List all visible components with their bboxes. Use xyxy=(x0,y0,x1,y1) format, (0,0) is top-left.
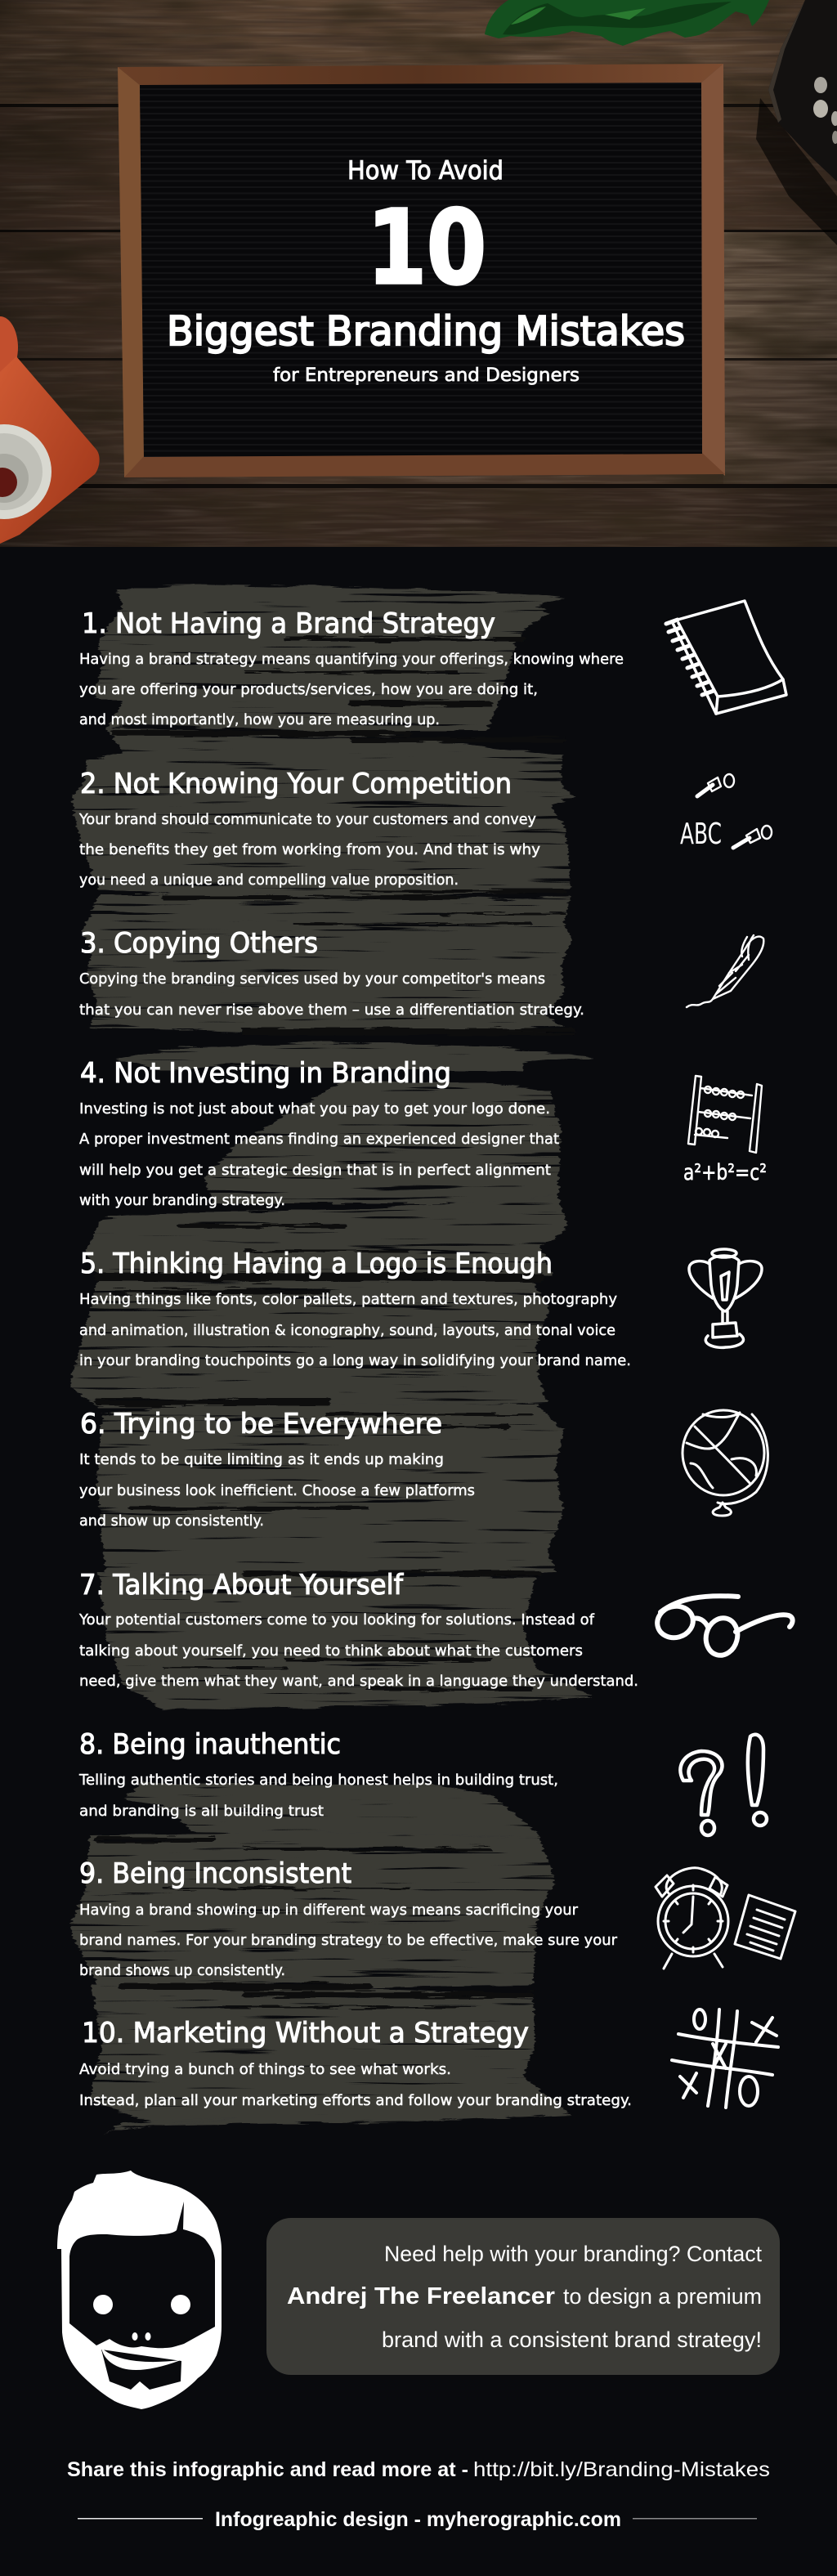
icon: tic tac toe xyxy=(672,2009,778,2108)
body line: and animation, illustration & iconography, sound, layouts, and tonal voice xyxy=(79,1322,615,1339)
item 3 xyxy=(79,927,584,1019)
body line: Having things like fonts, color pallets, pattern and textures, photography xyxy=(79,1291,617,1308)
brush stroke background xyxy=(69,584,593,2135)
body line: Telling authentic stories and being honest helps in building trust, xyxy=(78,1772,558,1789)
callout line: Need help with your branding? Contact xyxy=(384,2242,762,2266)
icon: alarm clock and paper xyxy=(656,1868,795,1969)
hero photo: wooden table xyxy=(0,0,837,547)
body line: in your branding touchpoints go a long way in solidifying your brand name. xyxy=(79,1352,631,1369)
nostrils xyxy=(132,2332,150,2341)
formula: a²+b²=c² xyxy=(683,1160,767,1185)
callout line: brand with a consistent brand strategy! xyxy=(382,2327,762,2352)
body line: Copying the branding services used by your competitor's means xyxy=(79,970,545,988)
body line: need, give them what they want, and speak in a language they understand. xyxy=(79,1673,638,1690)
body line: brand shows up consistently. xyxy=(79,1962,285,1979)
body line: brand names. For your branding strategy to be effective, make sure your xyxy=(79,1932,618,1949)
item 5 xyxy=(79,1248,631,1369)
heading: 9. Being Inconsistent xyxy=(79,1857,351,1890)
face xyxy=(69,2202,215,2348)
body line: with your branding strategy. xyxy=(79,1192,285,1209)
photo prop: vintage typewriter xyxy=(756,0,837,245)
heading: 5. Thinking Having a Logo is Enough xyxy=(80,1248,553,1280)
body line: you need a unique and compelling value proposition. xyxy=(79,871,459,889)
item 7 xyxy=(78,1569,638,1690)
heading: 3. Copying Others xyxy=(80,927,318,960)
heading: 7. Talking About Yourself xyxy=(79,1569,404,1602)
pin xyxy=(697,774,734,796)
heading: 1. Not Having a Brand Strategy xyxy=(82,607,495,640)
frame: bottom rail xyxy=(124,453,725,477)
heading: 4. Not Investing in Branding xyxy=(80,1057,451,1090)
frame: right rail xyxy=(701,64,725,476)
body line: that you can never rise above them – use a differentiation strategy. xyxy=(79,1001,584,1019)
icon: question and exclamation marks xyxy=(680,1735,767,1835)
text: ABC: ABC xyxy=(680,818,722,851)
icon: pen xyxy=(687,935,763,1007)
body line: talking about yourself, you need to think about what the customers xyxy=(79,1642,583,1660)
alarm clock xyxy=(656,1868,728,1969)
icon: trophy xyxy=(689,1249,762,1347)
paper note xyxy=(735,1895,795,1959)
body line: Your potential customers come to you looking for solutions. Instead of xyxy=(78,1611,595,1628)
letter board with wooden frame xyxy=(118,64,725,477)
body line: and branding is all building trust xyxy=(79,1803,324,1820)
pin xyxy=(733,826,772,848)
body line: Investing is not just about what you pay to get your logo done. xyxy=(79,1100,550,1118)
heading: 10. Marketing Without a Strategy xyxy=(82,2017,529,2050)
frame: left rail xyxy=(118,67,144,477)
item 4 xyxy=(79,1057,559,1209)
body line: A proper investment means finding an experienced designer that xyxy=(79,1131,559,1148)
item 10 xyxy=(79,2017,632,2109)
smile xyxy=(101,2348,181,2370)
share line: Share this infographic and read more at - xyxy=(67,2458,468,2481)
hair and beard xyxy=(57,2171,222,2409)
photo prop: orange rotary phone xyxy=(0,316,100,544)
heading: 6. Trying to be Everywhere xyxy=(80,1408,442,1440)
abacus xyxy=(688,1076,762,1153)
title: biggest branding mistakes: Biggest Branding Mistakes xyxy=(167,308,685,355)
body line: the benefits they get from working from you. And that is why xyxy=(79,841,540,858)
share line: http://bit.ly/Branding-Mistakes xyxy=(473,2458,770,2481)
icon: spiral notebook xyxy=(666,601,786,714)
item 9 xyxy=(79,1857,618,1979)
eyes xyxy=(93,2295,190,2314)
photo prop: green leaf xyxy=(485,0,769,46)
author avatar: bearded face xyxy=(57,2171,222,2409)
title: number 10: 10 xyxy=(367,189,486,307)
board felt xyxy=(140,83,702,457)
item 8 xyxy=(78,1728,558,1820)
body line: Avoid trying a bunch of things to see what works. xyxy=(79,2061,451,2078)
item 6 xyxy=(79,1408,475,1530)
heading: 2. Not Knowing Your Competition xyxy=(80,768,512,800)
item 2 xyxy=(78,768,540,889)
icon: globe xyxy=(683,1410,768,1516)
heading: 8. Being inauthentic xyxy=(79,1728,341,1761)
body line: It tends to be quite limiting as it ends up making xyxy=(79,1451,444,1468)
body line: and show up consistently. xyxy=(79,1512,264,1530)
icon: abacus with formula xyxy=(683,1076,767,1185)
callout line with bold name: Andrej The Freelancer xyxy=(287,2283,555,2309)
subtitle: for Entrepreneurs and Designers xyxy=(273,365,580,386)
credit line with rules: Infogreaphic design - myherographic.com xyxy=(215,2508,621,2531)
body line: Having a brand strategy means quantifying your offerings, knowing where xyxy=(79,651,624,668)
title: how to avoid: How To Avoid xyxy=(347,156,504,186)
body line: will help you get a strategic design that is in perfect alignment xyxy=(79,1162,551,1179)
icon: glasses xyxy=(654,1596,793,1659)
mouth xyxy=(101,2350,181,2390)
body line: Your brand should communicate to your customers and convey xyxy=(78,811,536,828)
callout line: to design a premium xyxy=(563,2284,762,2309)
callout panel xyxy=(266,2218,780,2375)
body line: Having a brand showing up in different ways means sacrificing your xyxy=(79,1902,579,1919)
icon: pins and ABC xyxy=(680,774,772,851)
item 1 xyxy=(79,607,624,728)
share line xyxy=(67,2458,770,2481)
body line: you are offering your products/services, how you are doing it, xyxy=(79,681,538,698)
body line: your business look inefficient. Choose a few platforms xyxy=(79,1482,475,1499)
body line: Instead, plan all your marketing efforts and follow your branding strategy. xyxy=(79,2092,632,2109)
body line: and most importantly, how you are measuring up. xyxy=(79,711,440,728)
frame: top rail xyxy=(118,64,723,85)
